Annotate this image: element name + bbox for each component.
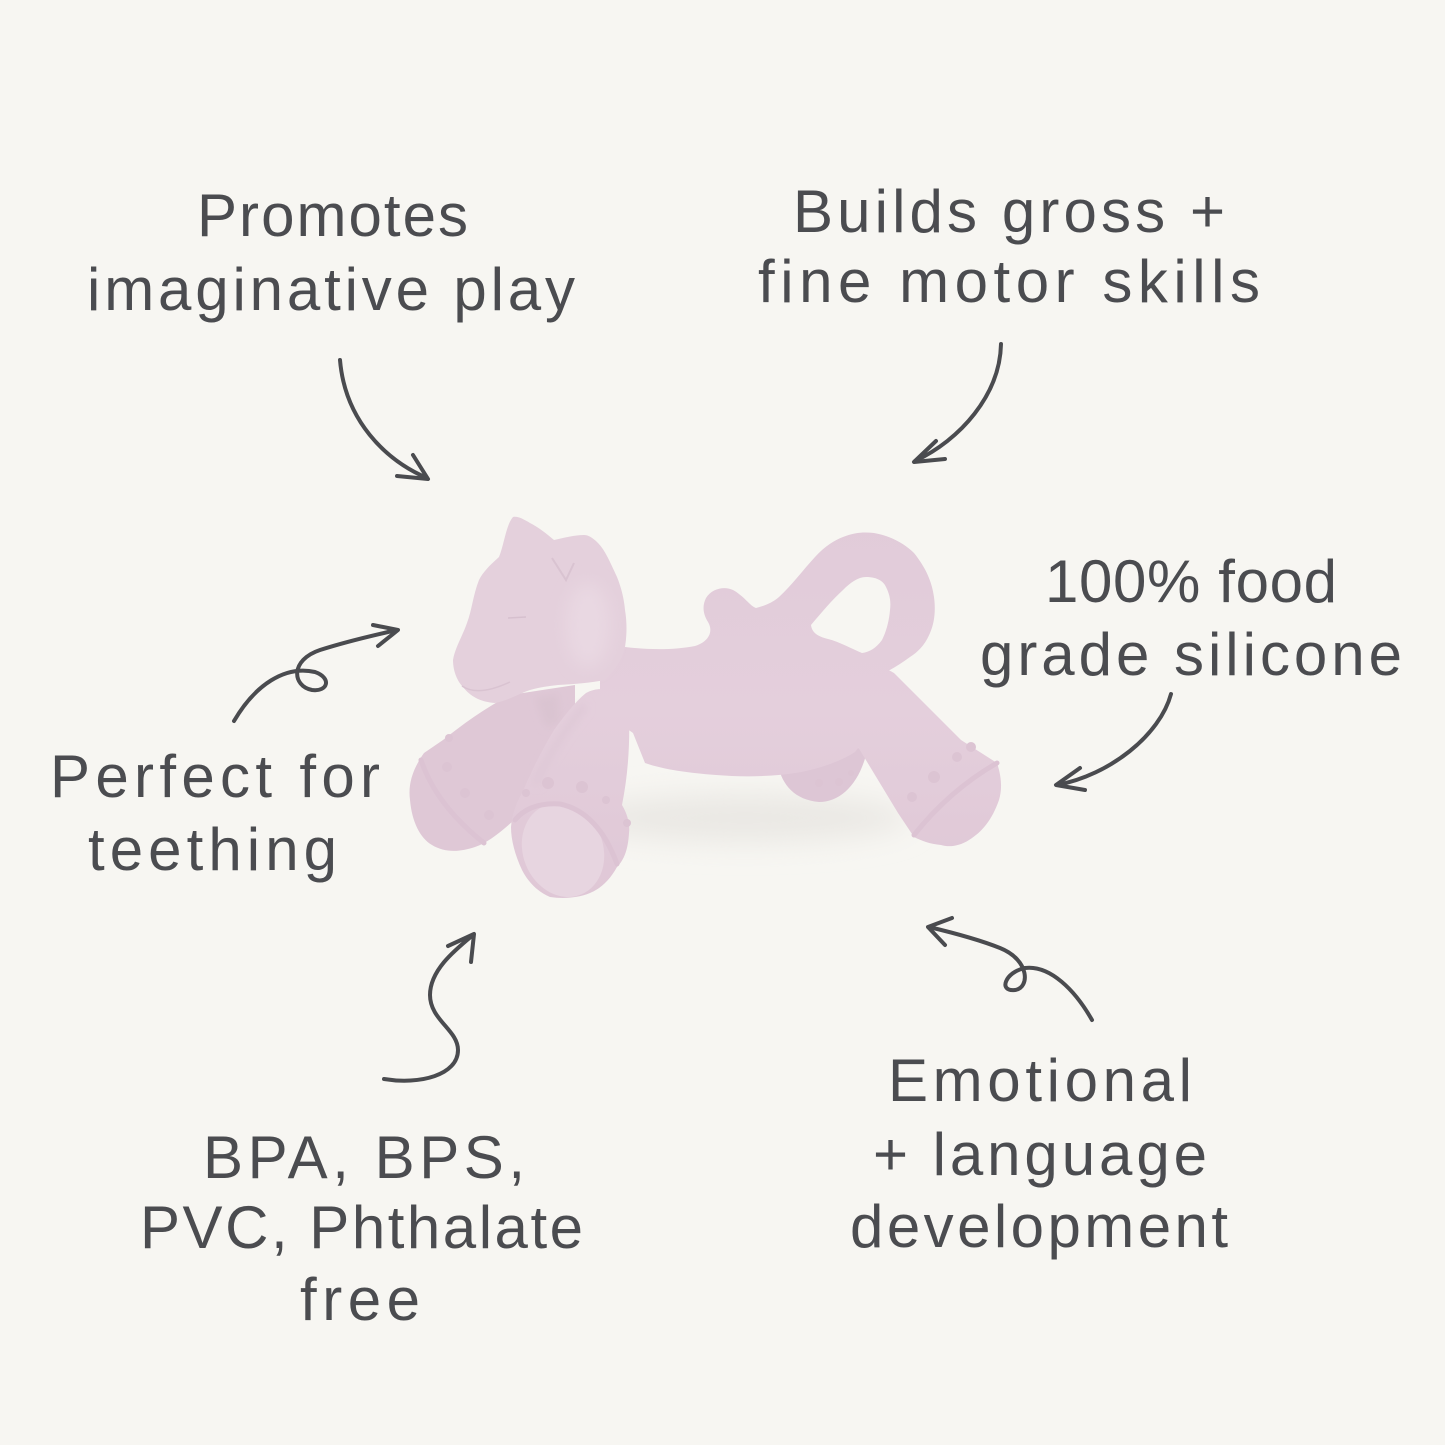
cat ground shadow xyxy=(580,794,910,842)
text: builds gross and fine motor skills xyxy=(758,178,1260,315)
arrow: emotional development looped arrow to cat xyxy=(928,918,1092,1020)
text: promotes imaginative play xyxy=(87,182,575,323)
text: 100% food grade silicone xyxy=(980,548,1402,688)
text: promotes imaginative play: Promotes xyxy=(197,182,468,249)
arrow: motor skills to cat xyxy=(914,344,1001,462)
cat tail and body xyxy=(600,532,935,776)
text: builds gross and fine motor skills: Builds gross + xyxy=(793,178,1225,245)
cat chest shadow xyxy=(535,694,560,728)
text: 100% food grade silicone: grade silicone xyxy=(980,621,1402,688)
text: perfect for teething xyxy=(50,743,380,883)
text: perfect for teething: teething xyxy=(88,816,337,883)
text: builds gross and fine motor skills: fine motor skills xyxy=(758,248,1260,315)
text: emotional and language development xyxy=(850,1047,1228,1260)
cat rear far foot xyxy=(778,740,866,802)
text: emotional and language development: development xyxy=(850,1193,1228,1260)
arrow: imaginative play to cat xyxy=(340,360,428,479)
arrow: BPA free wavy arrow to cat xyxy=(384,934,474,1081)
cat teething bumps xyxy=(442,734,976,827)
cat head xyxy=(453,517,626,703)
cat mouth line xyxy=(462,682,510,691)
text: BPA BPS PVC phthalate free xyxy=(140,1124,583,1333)
arrow: silicone to cat xyxy=(1056,694,1171,790)
cat leg rings xyxy=(421,760,997,864)
illustration: pink silicone cat teether xyxy=(410,517,1001,909)
cat front near leg xyxy=(511,689,629,898)
cat ear crease xyxy=(552,558,574,580)
cat head highlight xyxy=(566,583,610,667)
cat rear near leg xyxy=(855,667,1001,846)
text: promotes imaginative play: imaginative play xyxy=(87,256,575,323)
cat closed eye xyxy=(508,617,526,618)
arrow: teething looped arrow to cat xyxy=(234,625,398,721)
text: 100% food grade silicone: 100% food xyxy=(1045,548,1337,615)
cat front far leg xyxy=(410,685,575,851)
text: emotional and language development: + language xyxy=(873,1121,1207,1188)
cat near leg inner shading xyxy=(535,705,585,785)
text: emotional and language development: Emotional xyxy=(888,1047,1192,1114)
cat paw face xyxy=(508,791,618,909)
text: BPA BPS PVC phthalate free: PVC, Phthalate xyxy=(140,1194,583,1261)
text: BPA BPS PVC phthalate free: free xyxy=(300,1266,420,1333)
text: BPA BPS PVC phthalate free: BPA, BPS, xyxy=(203,1124,525,1191)
text: perfect for teething: Perfect for xyxy=(50,743,380,810)
